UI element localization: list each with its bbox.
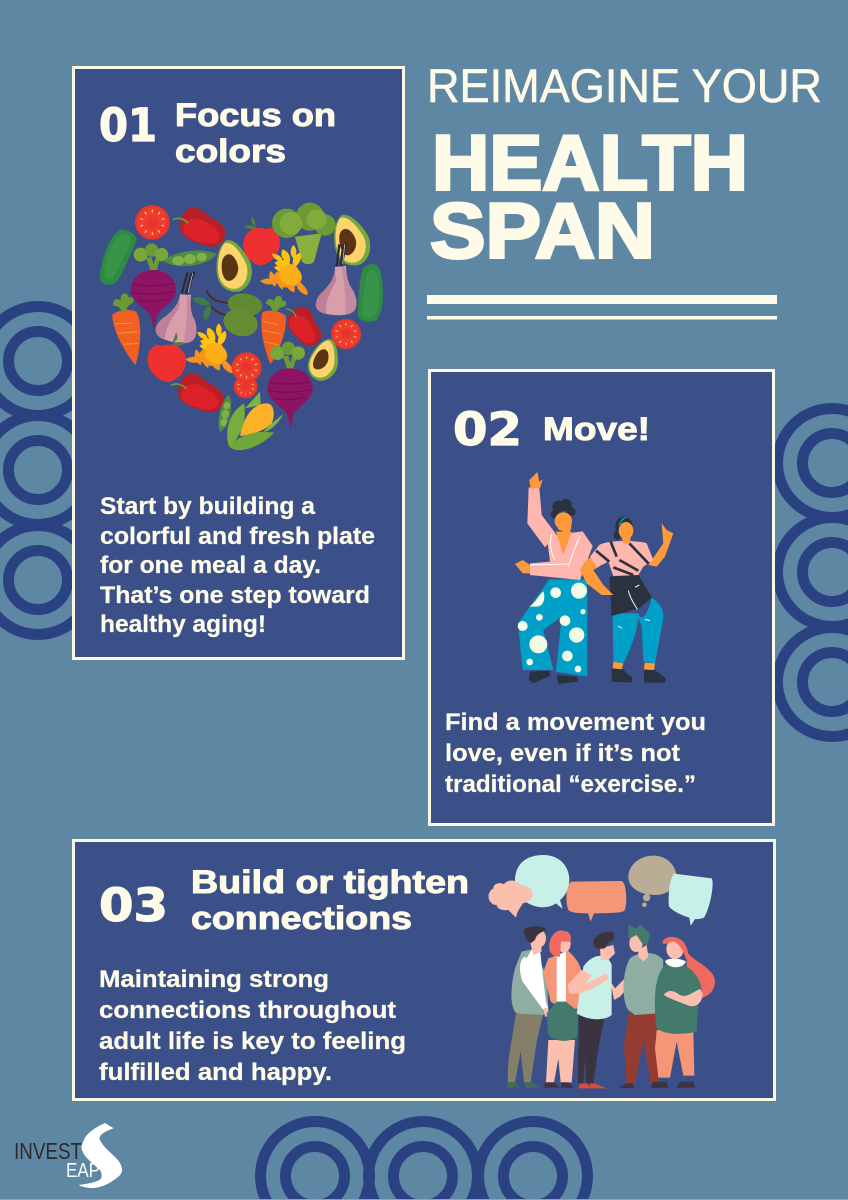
logo text: eap: EAP: [66, 1160, 100, 1182]
title line: span: SPAN: [430, 186, 655, 274]
decorative circles: left: [0, 306, 92, 634]
body text: love, even if it’s not: [445, 740, 680, 767]
heading: focus on colors: Focus on: [175, 97, 336, 133]
panel: build connections: [74, 840, 774, 1100]
broccoli: [272, 203, 336, 264]
body text: connections throughout: [99, 997, 396, 1024]
body text: healthy aging!: [100, 611, 266, 638]
body text: Start by building a: [100, 493, 316, 520]
decorative circles: bottom: [260, 1122, 588, 1200]
heading: build or tighten connections: connections: [191, 900, 412, 936]
number 01: 01: [99, 99, 157, 152]
body text: traditional “exercise.”: [445, 771, 696, 798]
heading: build or tighten connections: [191, 864, 469, 936]
dancer left: [515, 472, 593, 684]
heading: build or tighten connections: Build or tighten: [191, 864, 469, 900]
logo: invest eap: [14, 1123, 122, 1188]
body text: Find a movement you: [445, 709, 706, 736]
number 02: 02: [453, 403, 522, 456]
heading: focus on colors: colors: [175, 133, 286, 169]
illustration: heart of vegetables: [98, 203, 388, 450]
illustration: two people dancing: [515, 472, 673, 684]
logo mark: S: [78, 1123, 122, 1188]
logo text: invest: INVEST: [14, 1138, 82, 1164]
number 03: 03: [99, 879, 168, 932]
person 5: [651, 937, 715, 1088]
panel: focus on colors: [74, 68, 404, 658]
heading: move: Move!: [543, 411, 650, 447]
speech bubbles: [489, 855, 713, 926]
illustration: group of people talking: [489, 855, 715, 1088]
body text: for one meal a day.: [100, 552, 321, 579]
title rules: [427, 295, 777, 320]
person 3: [567, 932, 640, 1088]
body text: adult life is key to feeling: [99, 1028, 406, 1055]
decorative circles: right: [778, 408, 848, 736]
dancer right: [580, 517, 673, 683]
body text: Maintaining strong: [99, 966, 329, 993]
heading: focus on colors: [175, 97, 336, 169]
body text: That’s one step toward: [100, 582, 370, 609]
panel: move: [430, 370, 774, 824]
title line: health: HEALTH: [432, 118, 748, 206]
corn: [227, 392, 283, 450]
person 4: [618, 924, 663, 1088]
body text: fulfilled and happy.: [99, 1059, 332, 1086]
olives: [192, 290, 264, 340]
title line: reimagine your: REIMAGINE YOUR: [427, 59, 822, 112]
body text: colorful and fresh plate: [100, 523, 375, 550]
body text: [100, 493, 375, 638]
body text: [445, 709, 706, 798]
body text: [99, 966, 406, 1086]
person 2: [543, 930, 582, 1088]
person 1: [507, 926, 548, 1088]
title: [427, 59, 822, 274]
